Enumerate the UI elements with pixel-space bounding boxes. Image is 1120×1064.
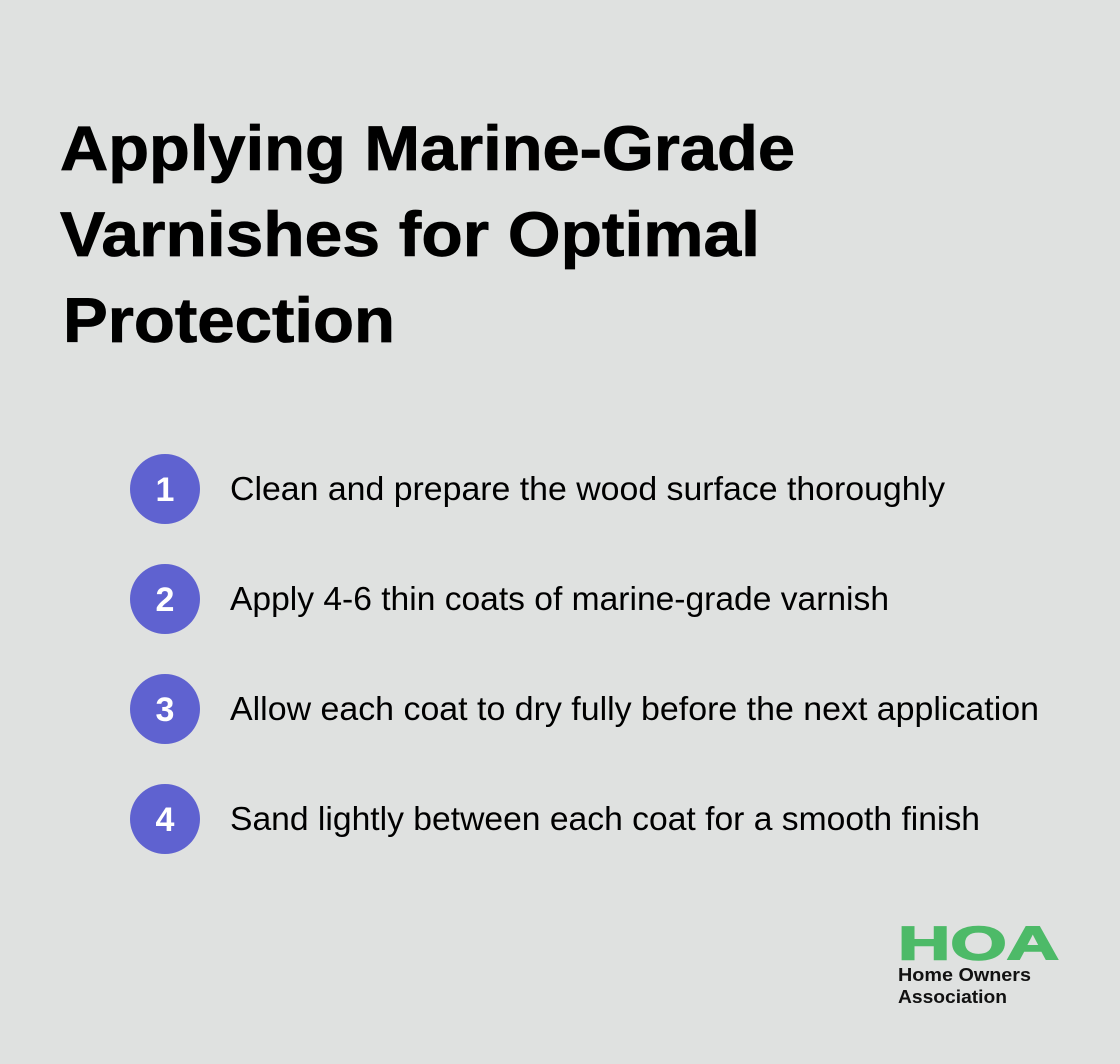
title: Applying Marine-Grade — [60, 114, 795, 184]
step 1 — [130, 454, 946, 524]
logo: Home Owners Association — [898, 916, 1059, 1007]
step 2 — [130, 564, 889, 634]
number badge 2: 2 — [156, 581, 174, 619]
title: Protection — [63, 286, 395, 356]
number badge 1: 1 — [156, 471, 174, 509]
logo caption: Association — [898, 986, 1007, 1007]
step 2 text: Apply 4-6 thin coats of marine-grade varnish — [230, 580, 889, 617]
step 3 — [130, 674, 1039, 744]
number badge 3 — [130, 674, 200, 744]
number badge 2 — [130, 564, 200, 634]
logo caption: Home Owners — [898, 964, 1031, 985]
step 3 text: Allow each coat to dry fully before the next application — [230, 690, 1039, 727]
title: Varnishes for Optimal — [60, 200, 760, 270]
step 4 — [130, 784, 980, 854]
logo caption — [898, 964, 1031, 1007]
number badge 4: 4 — [156, 801, 175, 839]
title — [60, 114, 795, 356]
logo mark HOA: HOA — [898, 916, 1059, 970]
number badge 1 — [130, 454, 200, 524]
number badge 3: 3 — [156, 691, 174, 729]
number badge 4 — [130, 784, 200, 854]
step 4 text: Sand lightly between each coat for a smooth finish — [230, 800, 980, 837]
step 1 text: Clean and prepare the wood surface thoroughly — [230, 470, 946, 507]
